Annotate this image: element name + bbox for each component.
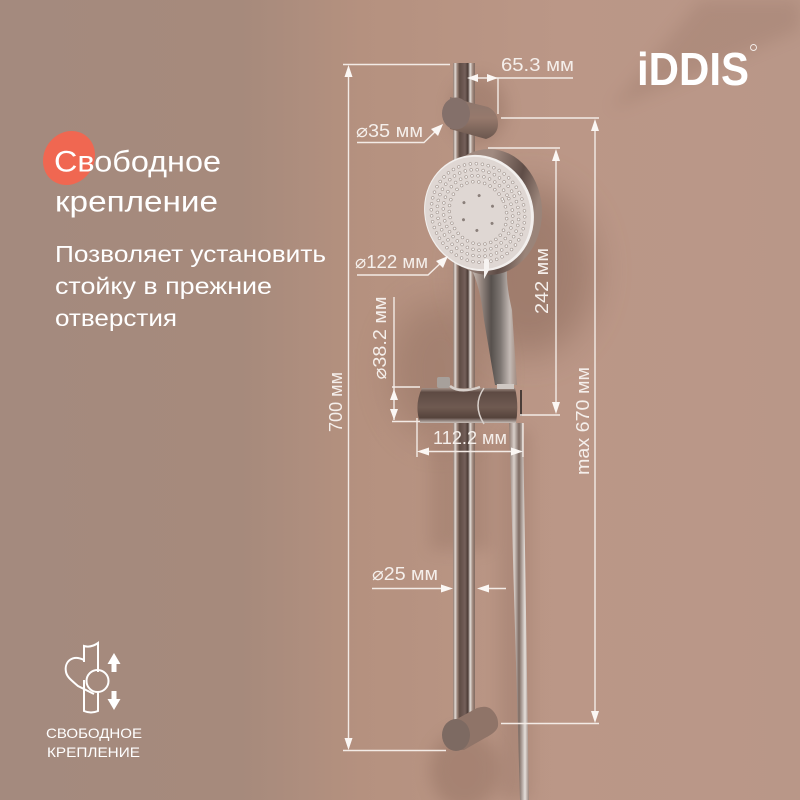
slider bbox=[417, 377, 522, 424]
dimension: diameter 38.2 mm bbox=[370, 296, 420, 422]
top bracket bbox=[442, 97, 498, 139]
body text: отверстия bbox=[55, 305, 177, 331]
logo: iDDIS bbox=[637, 43, 749, 95]
dimension: 242 mm: 242 мм bbox=[532, 248, 552, 314]
dimension: 112.2 mm: 112.2 мм bbox=[433, 428, 507, 448]
heading: крепление bbox=[55, 186, 218, 218]
accent blob bbox=[32, 121, 106, 195]
heading bbox=[54, 146, 221, 218]
dimension: 112.2 mm bbox=[417, 418, 523, 457]
dimension: diameter 25 mm: ⌀25 мм bbox=[372, 564, 438, 584]
dimension: diameter 122 mm bbox=[355, 252, 448, 275]
dimension: 700 mm bbox=[326, 64, 450, 750]
dimension: max 670 mm: max 670 мм bbox=[573, 367, 593, 475]
dimension: 700 mm: 700 мм bbox=[326, 372, 346, 432]
icon: free mounting bbox=[66, 643, 120, 712]
dimension: diameter 122 mm: ⌀122 мм bbox=[355, 252, 428, 272]
shower head bbox=[405, 137, 553, 289]
dimension: diameter 35 mm bbox=[356, 121, 443, 142]
rail bbox=[453, 63, 475, 723]
dimension: 65.3 mm bbox=[467, 55, 574, 114]
dimension: 65.3 mm: 65.3 мм bbox=[501, 55, 574, 75]
hose bbox=[509, 423, 529, 800]
dimension: max 670 mm bbox=[501, 118, 599, 724]
dimension: diameter 25 mm bbox=[372, 564, 506, 592]
body text: стойку в прежние bbox=[55, 273, 272, 299]
product: shower set bbox=[405, 63, 553, 800]
dimension: 242 mm bbox=[488, 148, 560, 415]
nozzles bbox=[415, 148, 541, 278]
dimension: diameter 38.2 mm: ⌀38.2 мм bbox=[370, 296, 390, 380]
icon caption: СВОБОДНОЕ bbox=[46, 725, 142, 741]
body text bbox=[55, 241, 326, 331]
bottom bracket bbox=[442, 707, 498, 751]
handle bbox=[470, 266, 517, 385]
wall shadows bbox=[390, 0, 800, 800]
heading: Свободное bbox=[54, 146, 221, 178]
icon caption: КРЕПЛЕНИЕ bbox=[47, 744, 140, 760]
icon caption bbox=[46, 725, 142, 760]
hook bbox=[484, 258, 489, 279]
dimension: diameter 35 mm: ⌀35 мм bbox=[356, 121, 423, 141]
body text: Позволяет установить bbox=[55, 241, 326, 267]
